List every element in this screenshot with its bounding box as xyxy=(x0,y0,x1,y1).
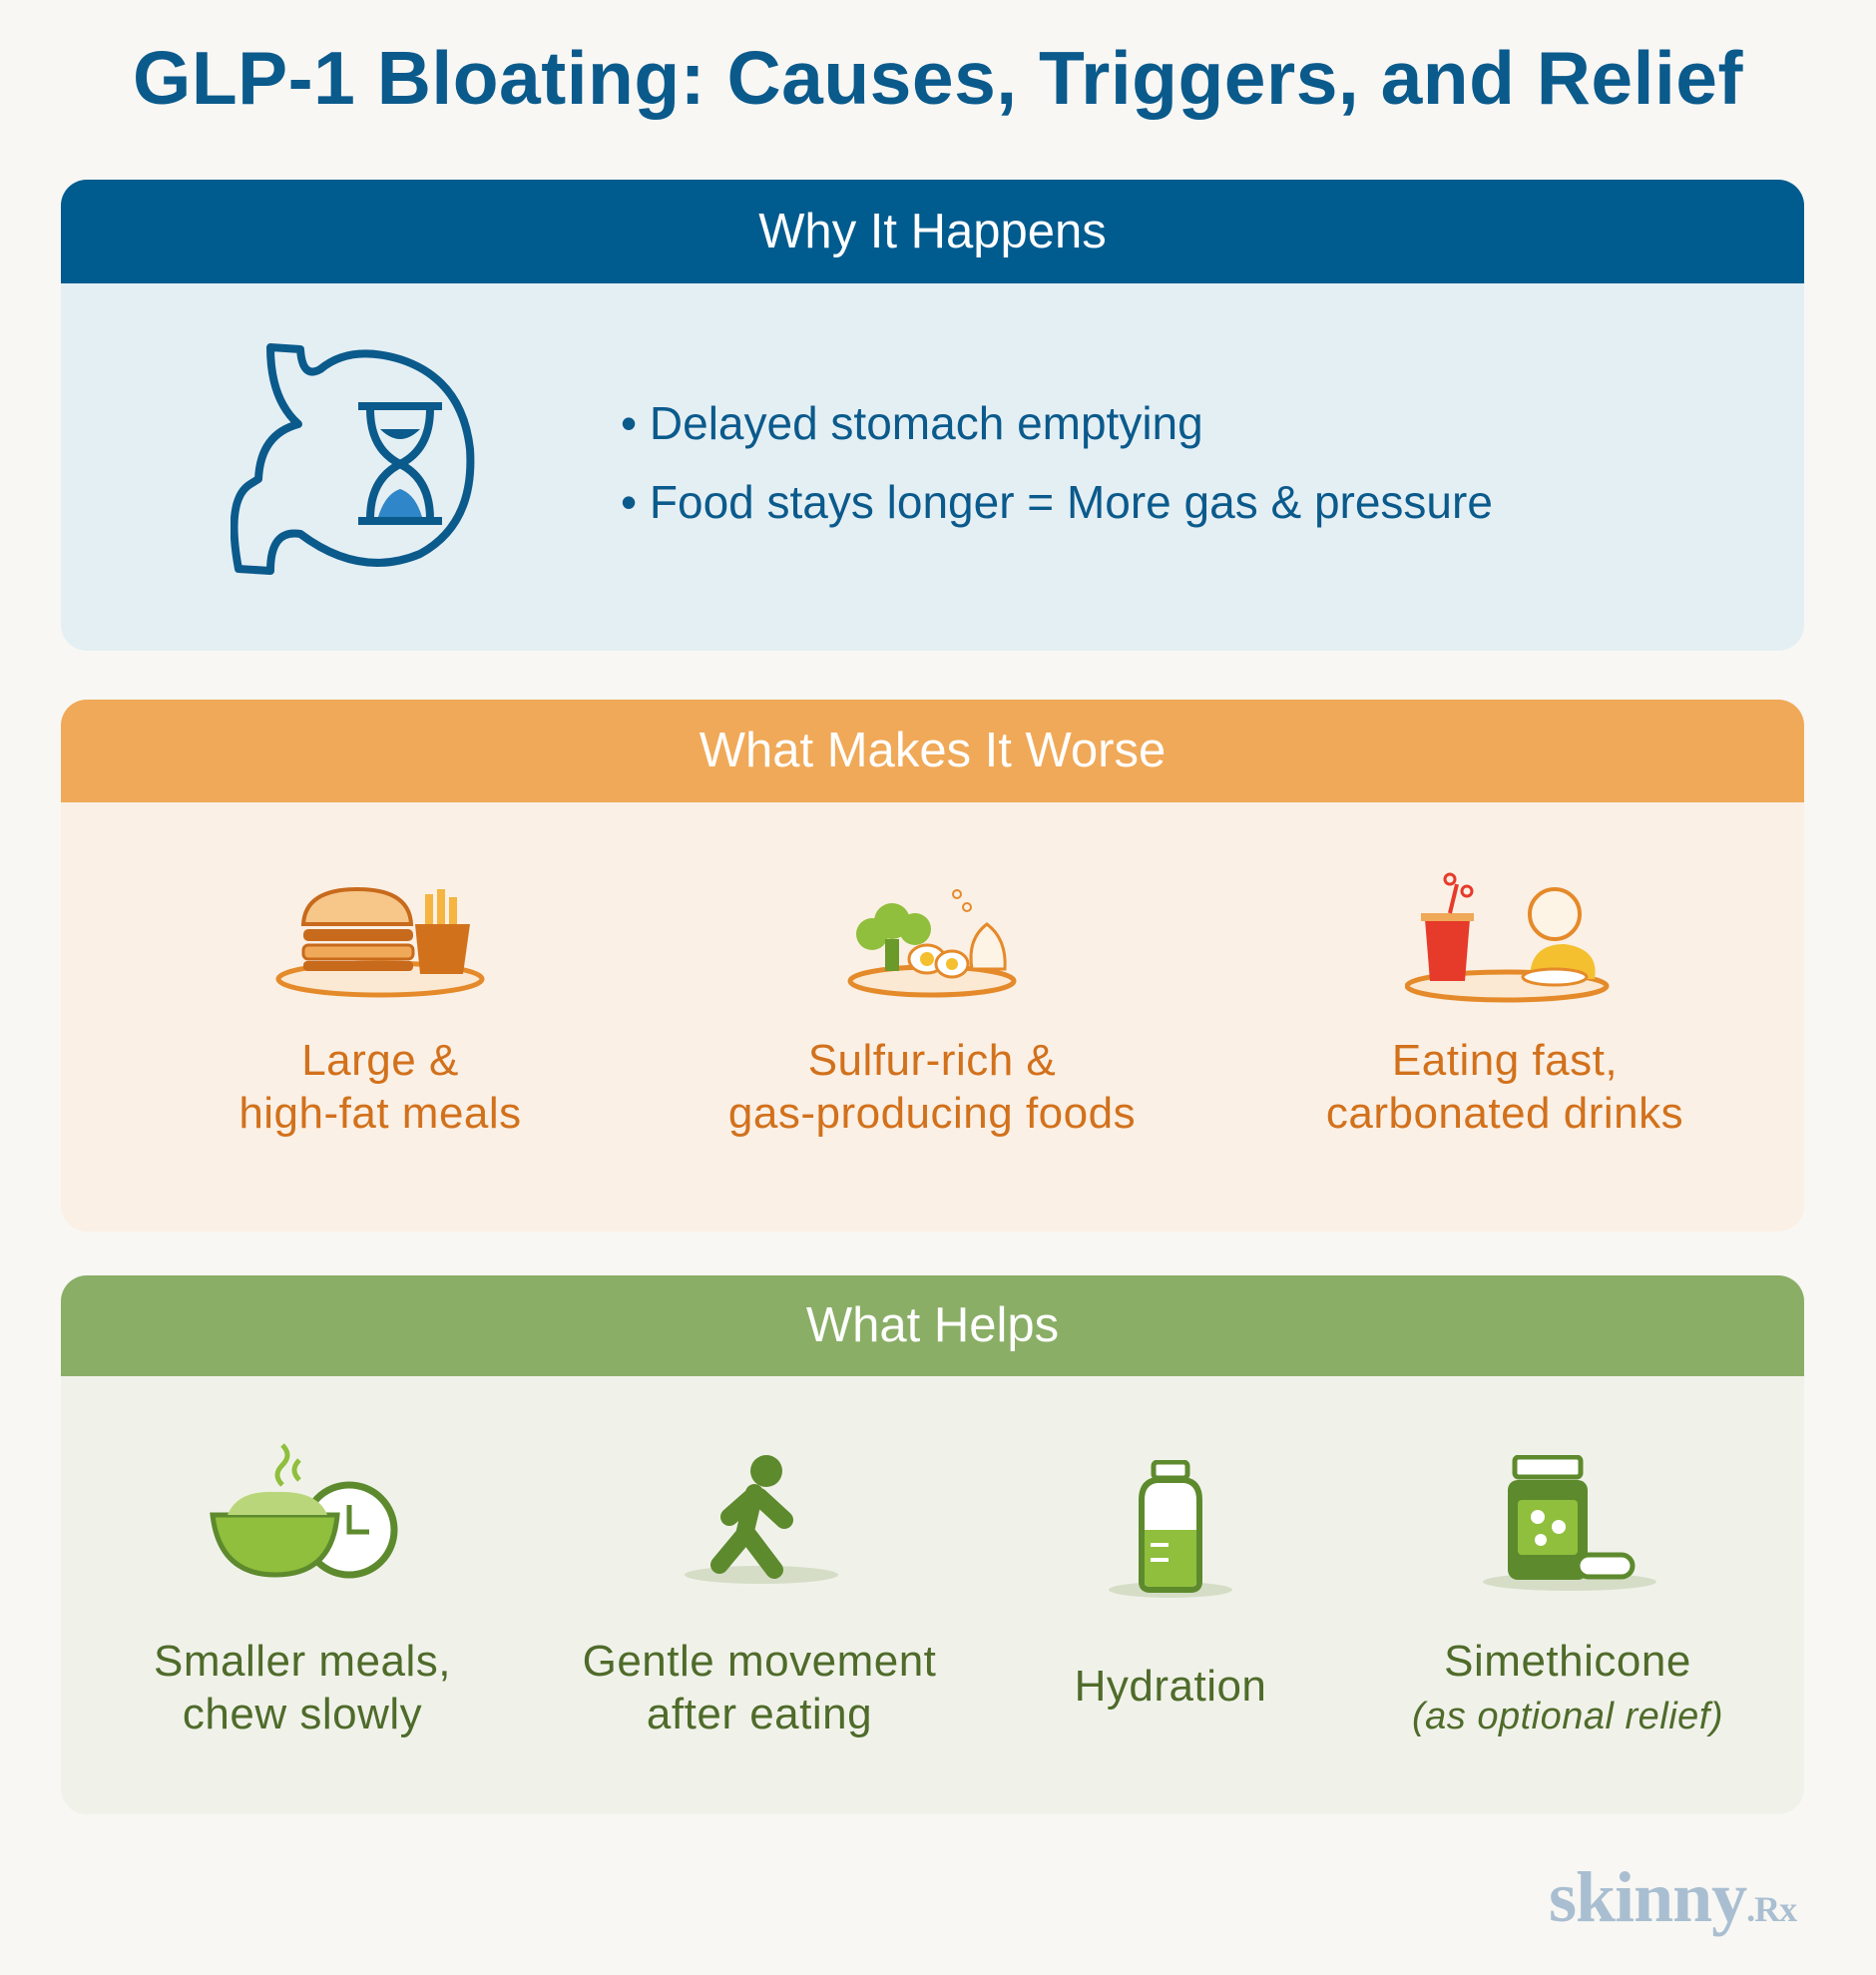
icon: bowl and clock xyxy=(210,1443,397,1579)
header: what makes it worse xyxy=(61,700,1804,802)
label: Hydration xyxy=(1075,1662,1266,1711)
panel: what helps xyxy=(61,1275,1804,1814)
label: Smaller meals, xyxy=(154,1637,451,1686)
label xyxy=(154,1637,451,1738)
title: GLP-1 Bloating: Causes, Triggers, and Relief xyxy=(133,36,1743,120)
label: Large & xyxy=(301,1036,459,1085)
icon: stomach with hourglass xyxy=(231,343,475,575)
label: gas-producing foods xyxy=(728,1089,1136,1138)
item: smaller meals xyxy=(154,1443,451,1738)
label xyxy=(1412,1637,1723,1737)
header: what helps: What Helps xyxy=(806,1298,1059,1352)
label xyxy=(583,1637,936,1738)
label: Gentle movement xyxy=(583,1637,936,1686)
item: large meals xyxy=(238,887,522,1138)
label: Simethicone xyxy=(1444,1637,1691,1686)
icon: pill bottle xyxy=(1483,1455,1656,1591)
text: bullets: • Delayed stomach emptying xyxy=(621,397,1203,449)
logo: skinny rx: skinny.Rx xyxy=(1549,1857,1796,1937)
icon: water bottle xyxy=(1109,1460,1232,1598)
panel: what makes it worse xyxy=(61,700,1804,1232)
label xyxy=(238,1036,522,1138)
label: high-fat meals xyxy=(238,1089,522,1138)
item: gentle movement xyxy=(583,1455,936,1738)
text: bullets: • Food stays longer = More gas & pressure xyxy=(621,476,1493,528)
item: simethicone xyxy=(1412,1455,1723,1737)
label xyxy=(1326,1036,1683,1138)
icon: burger and fries xyxy=(275,887,485,998)
text: bullets xyxy=(621,397,1493,528)
icon: broccoli eggs garlic xyxy=(848,889,1016,998)
label: (as optional relief) xyxy=(1412,1696,1723,1737)
label: chew slowly xyxy=(183,1690,422,1738)
icon: walking person xyxy=(685,1455,838,1584)
label: after eating xyxy=(647,1690,872,1738)
header: why it happens xyxy=(61,180,1804,283)
header: what helps xyxy=(61,1275,1804,1376)
label: Eating fast, xyxy=(1392,1036,1618,1085)
item: sulfur foods xyxy=(728,889,1136,1138)
item: hydration xyxy=(1075,1460,1266,1711)
icon: soda and eating person xyxy=(1405,872,1609,1002)
label: carbonated drinks xyxy=(1326,1089,1683,1138)
label: Sulfur-rich & xyxy=(808,1036,1056,1085)
header: what makes it worse: What Makes It Worse xyxy=(700,724,1166,777)
header: why it happens: Why It Happens xyxy=(758,205,1107,258)
label xyxy=(728,1036,1136,1138)
item: eating fast xyxy=(1326,872,1683,1138)
panel: why it happens xyxy=(61,180,1804,651)
